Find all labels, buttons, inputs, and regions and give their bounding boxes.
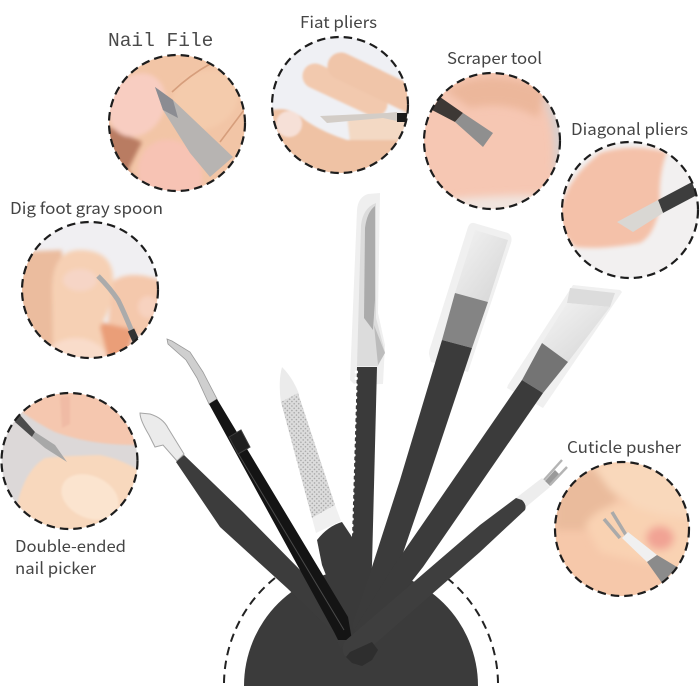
tool in use <box>320 112 397 123</box>
blade <box>542 303 610 362</box>
base: dark half circle <box>244 569 478 686</box>
scraper metal part <box>455 113 493 147</box>
file tip shade <box>155 87 178 118</box>
photo circle: scraper tool <box>422 72 562 210</box>
spoon tip <box>167 339 217 404</box>
dashed ring <box>424 73 560 209</box>
tool: diagonal pliers <box>354 285 622 640</box>
label line 2: nail picker <box>15 555 97 579</box>
photo circle: fiat pliers <box>270 35 420 176</box>
label: cuticle pusher: Cuticle pusher <box>567 434 682 458</box>
spoon in use <box>98 276 133 334</box>
photo circle: double-ended nail picker <box>0 390 142 538</box>
thumb and hand <box>273 108 398 173</box>
photo content <box>555 462 689 596</box>
file textured surface <box>281 393 335 518</box>
picker in use: blade <box>32 432 67 462</box>
photo circle: nail file <box>108 54 246 192</box>
finger two <box>341 66 420 104</box>
blade <box>455 230 508 302</box>
scraper black part <box>432 97 463 122</box>
picker blade <box>140 413 184 461</box>
tool: double-ended nail picker <box>140 413 352 648</box>
label: fiat pliers: Fiat pliers <box>300 9 377 33</box>
label line 1: Double-ended <box>15 533 126 557</box>
label: double-ended nail picker <box>15 533 126 579</box>
gray section <box>442 293 488 348</box>
tip shade <box>567 288 615 307</box>
pusher handle <box>343 498 526 662</box>
sleeve <box>350 193 385 385</box>
rod highlight <box>236 450 344 630</box>
pivot <box>346 642 378 666</box>
picker in use: handle <box>15 415 35 437</box>
label: dig foot gray spoon: Dig foot gray spoon <box>10 195 163 219</box>
rod grip rings <box>229 430 250 454</box>
photo content <box>272 37 408 173</box>
photo content <box>562 142 698 278</box>
finger creases <box>172 64 244 142</box>
dashed ring <box>562 142 698 278</box>
photo circle: dig foot gray spoon <box>20 220 160 360</box>
handle <box>352 340 472 640</box>
gray section <box>522 343 568 393</box>
sleeve <box>429 223 512 372</box>
pusher gray tip <box>647 555 677 583</box>
dashed ring <box>272 37 408 173</box>
photo content <box>109 55 245 191</box>
handle <box>354 380 543 640</box>
picker handle <box>176 455 352 648</box>
photo content <box>2 393 138 529</box>
dashed ring <box>22 222 158 358</box>
blade shoulder <box>374 325 385 365</box>
tool: cuticle pusher <box>343 460 567 666</box>
middle finger <box>347 113 410 142</box>
handle <box>350 367 377 640</box>
dashed ring <box>555 462 689 596</box>
pliers metal part <box>617 200 663 232</box>
dashed arc around base <box>224 578 498 683</box>
finger one <box>315 76 375 104</box>
file neck <box>317 522 364 640</box>
spoon rod <box>209 399 352 640</box>
spoon dark end <box>131 330 136 341</box>
blade <box>357 203 385 366</box>
label: scraper tool: Scraper tool <box>447 45 542 69</box>
tool: dig foot gray spoon <box>167 339 352 640</box>
fork base <box>545 470 560 486</box>
file tip <box>280 367 299 403</box>
dashed ring <box>2 393 138 529</box>
photo circle: diagonal pliers <box>558 138 700 283</box>
fork prong two <box>550 467 567 485</box>
tool: saw-edge file <box>350 193 385 640</box>
blade streak <box>364 206 375 330</box>
tool black end <box>397 113 408 122</box>
photo content <box>424 73 560 209</box>
serrated edge <box>352 372 356 537</box>
pliers black part <box>658 182 697 213</box>
fork prong one <box>544 460 562 480</box>
pusher neck <box>516 478 550 507</box>
file in use <box>155 87 233 177</box>
file heel <box>312 505 341 533</box>
sleeve <box>507 285 622 408</box>
label: diagonal pliers: Diagonal pliers <box>571 116 688 140</box>
thumb nail <box>276 111 302 137</box>
dashed ring <box>109 55 245 191</box>
pusher neck <box>622 532 657 562</box>
tool: scraper <box>352 223 512 640</box>
fork prongs <box>604 512 626 538</box>
tool: nail file <box>280 367 364 640</box>
photo content <box>22 222 158 358</box>
photo circle: cuticle pusher <box>554 460 690 598</box>
label: nail file: Nail File <box>108 30 213 52</box>
fork tip <box>544 460 567 486</box>
